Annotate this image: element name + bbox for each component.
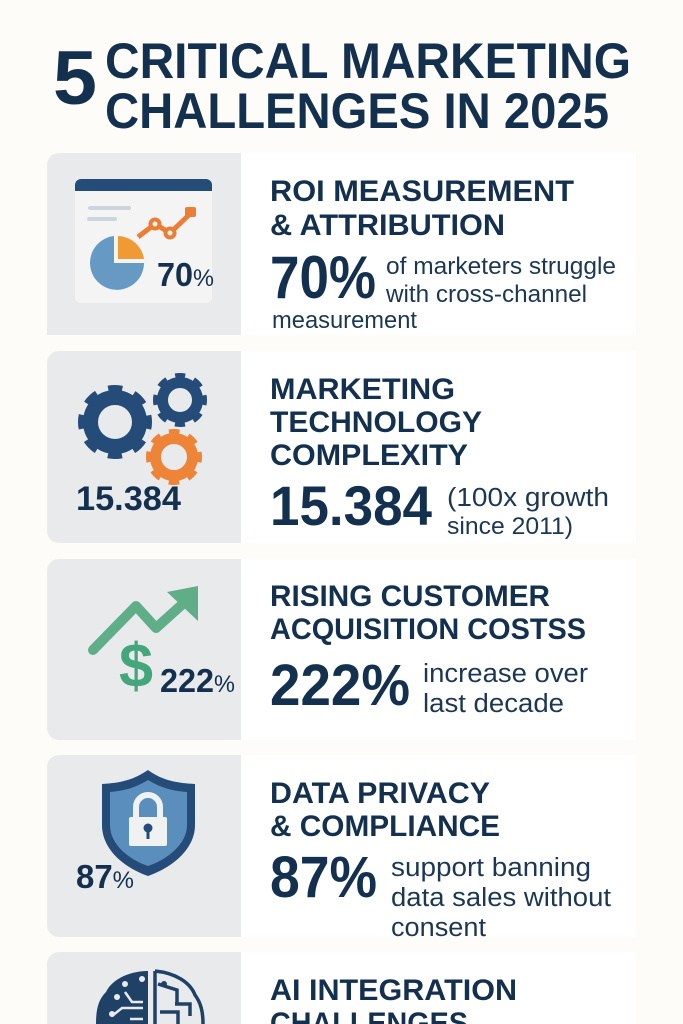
- heading: ROI measurement: & ATTRIBUTION: [270, 209, 505, 242]
- heading: rising customer acquisition costs: ACQUISITION COSTSS: [270, 613, 586, 646]
- title: CRITICAL MARKETING: [105, 33, 631, 89]
- heading: rising customer acquisition costs: RISING CUSTOMER: [270, 580, 550, 613]
- panel: marketing technology: [47, 351, 636, 543]
- heading: data privacy and compliance: DATA PRIVACY: [270, 777, 490, 810]
- stat label: 222%: 222%: [160, 662, 235, 699]
- description: of marketers struggle: [386, 253, 616, 280]
- description: increase over: [423, 660, 589, 688]
- heading: ROI measurement: [270, 175, 574, 242]
- description: measurement: [272, 307, 417, 334]
- title: 5: [53, 36, 97, 121]
- description: [423, 660, 589, 718]
- description: with cross-channel: [385, 281, 587, 308]
- description: [447, 484, 609, 540]
- description: consent: [391, 914, 486, 942]
- heading: marketing technology complexity: [270, 373, 482, 472]
- heading: data privacy and compliance: [270, 777, 500, 843]
- icon: rising arrow and dollar: [93, 586, 198, 701]
- panel: AI integration: [47, 952, 636, 1024]
- description: [391, 854, 611, 942]
- heading: marketing technology complexity: MARKETING: [270, 373, 455, 406]
- stat: 70%: 70%: [270, 244, 376, 311]
- heading: AI integration challenges: AI INTEGRATION: [270, 974, 517, 1007]
- icon: gears: [82, 376, 204, 482]
- heading: marketing technology complexity: COMPLEXITY: [270, 439, 468, 472]
- icon: analytics dashboard: [75, 179, 212, 303]
- stat label: 87%: 87%: [76, 858, 134, 895]
- title: [53, 33, 631, 139]
- icon: shield with padlock: [102, 770, 195, 876]
- icon: rising arrow and dollar: $: [119, 632, 153, 701]
- stat: 15.384: 15.384: [270, 474, 432, 537]
- heading: rising customer acquisition costs: [270, 580, 586, 646]
- stat: 87%: 87%: [270, 845, 377, 910]
- description: since 2011): [447, 513, 573, 540]
- stat label: 70%: 70%: [157, 256, 214, 293]
- panel: customer acquisition costs: [47, 559, 636, 740]
- heading: data privacy and compliance: & COMPLIANCE: [270, 810, 500, 843]
- description: last decade: [423, 690, 564, 718]
- description: data sales without: [391, 884, 611, 912]
- icon: AI brain: [96, 971, 203, 1024]
- stat: 222%: 222%: [270, 653, 410, 718]
- heading: ROI measurement: ROI MEASUREMENT: [270, 175, 574, 208]
- heading: AI integration challenges: [270, 974, 517, 1024]
- panel: data privacy: [47, 755, 636, 942]
- description: [272, 253, 616, 334]
- panel: ROI measurement: [47, 153, 636, 335]
- description: (100x growth: [447, 484, 609, 512]
- title: CHALLENGES IN 2025: [105, 83, 609, 139]
- description: support banning: [391, 854, 591, 882]
- heading: marketing technology complexity: TECHNOLOGY: [270, 406, 482, 439]
- stat label: 15.384: 15.384: [76, 480, 181, 518]
